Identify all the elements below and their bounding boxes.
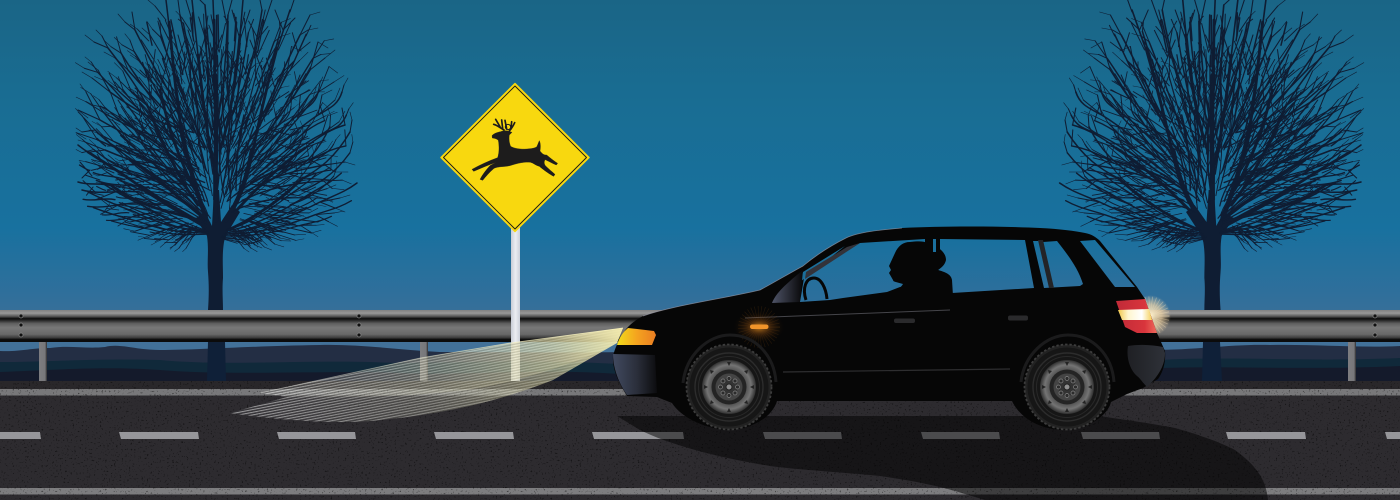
- headlight beam: [230, 328, 623, 422]
- side marker glow: [732, 310, 786, 344]
- deer crossing sign: [441, 84, 589, 381]
- car shadow on road: [617, 416, 1268, 500]
- belt line: [745, 310, 950, 318]
- distant hills: [0, 342, 1400, 382]
- car: [613, 226, 1171, 430]
- rear wheel arch: [1021, 335, 1114, 382]
- rear lamp glow: [1129, 295, 1171, 337]
- tail light bright band: [1118, 309, 1152, 320]
- middle side window: [938, 239, 1034, 293]
- roof pillar strip: [805, 243, 860, 279]
- tree: left bare silhouette: [64, 0, 369, 310]
- sign pole: [511, 226, 520, 381]
- beam hatch texture: [231, 334, 597, 422]
- tail light: [1116, 299, 1157, 333]
- rear bumper: [1127, 345, 1165, 387]
- beam upper edge highlight: [260, 328, 623, 393]
- front bumper: [613, 354, 657, 395]
- front wheel: [686, 344, 772, 430]
- sign diamond: [441, 84, 589, 232]
- guardrail posts: [39, 342, 1356, 381]
- icon: leaping deer: [472, 119, 558, 180]
- rear wheel: [1024, 344, 1110, 430]
- beam lit area: [230, 328, 623, 422]
- pillar gap: [933, 239, 936, 252]
- hood and windshield highlight: [643, 228, 902, 316]
- headlight: [617, 328, 656, 345]
- sign inner border: [444, 86, 586, 229]
- driver silhouette: [880, 241, 953, 296]
- rear side window: [1033, 241, 1083, 288]
- tree trunks below the guardrail: [207, 342, 1222, 381]
- sky: [0, 0, 1400, 345]
- steering wheel: [804, 278, 827, 300]
- guardrail: [0, 310, 1400, 342]
- road surface: [0, 381, 1400, 500]
- front wheel arch: [683, 335, 776, 383]
- door handles: [894, 316, 1028, 323]
- car body: [613, 226, 1165, 430]
- lower body line: [783, 369, 1010, 372]
- beam upper sheet: [260, 328, 623, 397]
- rear pillar strip: [1038, 240, 1054, 288]
- tree: right bare silhouette: [1046, 0, 1377, 310]
- windshield sliver: [800, 246, 845, 282]
- quarter mirror: [772, 270, 803, 303]
- tailgate window: [1080, 240, 1135, 287]
- lane dashes: [0, 432, 1400, 439]
- front side window: [800, 239, 925, 302]
- side marker lamp: [750, 324, 768, 329]
